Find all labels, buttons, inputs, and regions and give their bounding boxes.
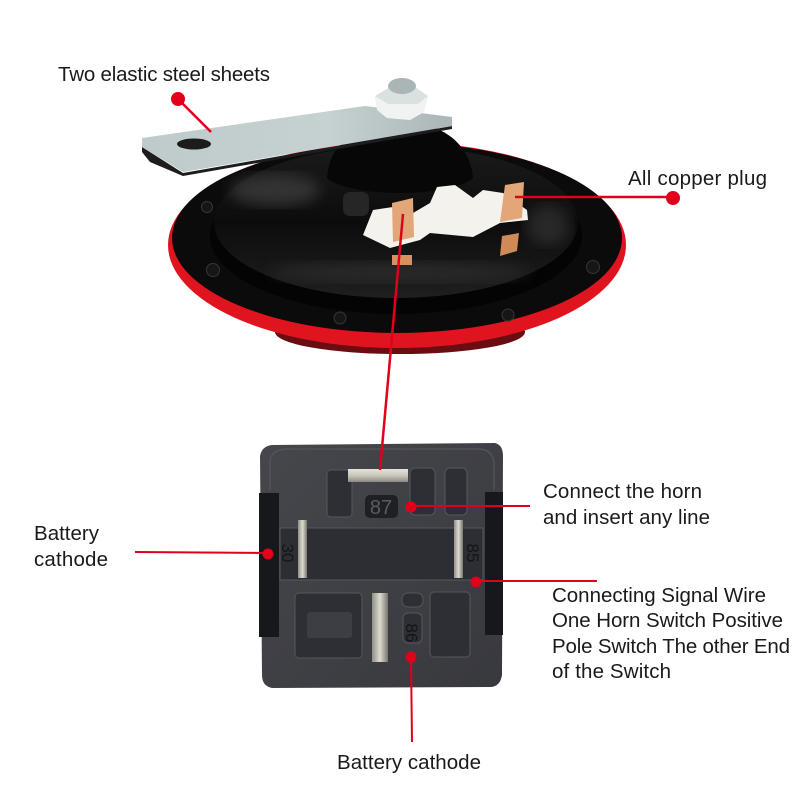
label 86: 86 — [402, 624, 421, 642]
red horn back — [275, 310, 525, 354]
bolt tip — [388, 78, 416, 94]
recessed panels — [280, 468, 483, 658]
dome skirt — [210, 158, 582, 314]
label: battery cathode left — [34, 522, 108, 571]
label: battery cathode left: Battery — [34, 522, 100, 545]
white plastic plug — [363, 185, 528, 248]
inner block — [307, 612, 352, 638]
copper pin right — [500, 182, 524, 222]
top edge inset — [270, 449, 494, 490]
label: connect the horn: and insert any line — [543, 506, 710, 529]
leader: plug to relay 87 — [380, 214, 403, 470]
red rim — [168, 142, 626, 348]
label 87: 87 — [370, 497, 392, 519]
horn photo — [142, 78, 626, 354]
label: two elastic steel sheets: Two elastic steel sheets — [58, 63, 270, 86]
bracket hole — [177, 138, 211, 150]
label: signal wire description: Connecting Signal Wire — [552, 584, 766, 607]
dome highlight right — [526, 205, 570, 245]
label: signal wire description: of the Switch — [552, 660, 671, 683]
dome lower shading — [270, 262, 530, 282]
plate bolts — [202, 202, 600, 324]
blade 85 — [454, 520, 463, 578]
copper reflections — [392, 255, 412, 265]
steel bracket underside — [142, 126, 452, 176]
label: signal wire description — [552, 584, 790, 683]
label 87 — [365, 495, 398, 519]
label: connect the horn: Connect the horn — [543, 480, 702, 503]
blade 30 — [298, 520, 307, 578]
hex nut — [375, 78, 428, 120]
label: signal wire description: One Horn Switch Positive — [552, 609, 783, 632]
horn dome — [214, 146, 578, 298]
relay body — [260, 443, 503, 688]
blade 87 — [348, 469, 408, 482]
steel bracket — [142, 106, 452, 172]
leader: copper plug — [515, 191, 680, 205]
leader: battery cathode bottom — [406, 652, 416, 742]
relay photo — [259, 443, 503, 688]
label 85: 85 — [463, 544, 482, 562]
copper pin left — [392, 198, 414, 242]
left slot — [259, 493, 279, 637]
leader: connect the horn — [406, 502, 530, 512]
right slot — [485, 492, 503, 635]
label: all copper plug: All copper plug — [628, 167, 767, 190]
label: battery cathode bottom: Battery cathode — [337, 751, 481, 774]
leader: steel sheets — [171, 92, 211, 132]
label 30: 30 — [278, 544, 297, 562]
black mounting plate — [172, 143, 622, 333]
leader: battery cathode left — [135, 548, 274, 560]
small dome stud — [343, 192, 369, 216]
dome highlight left — [230, 174, 320, 206]
leader: signal wire — [470, 576, 597, 588]
dome neck — [327, 122, 473, 193]
blade 86 — [372, 593, 388, 662]
label: connect the horn — [543, 480, 710, 529]
label: signal wire description: Pole Switch The other End — [552, 635, 790, 658]
label: battery cathode left: cathode — [34, 548, 108, 571]
